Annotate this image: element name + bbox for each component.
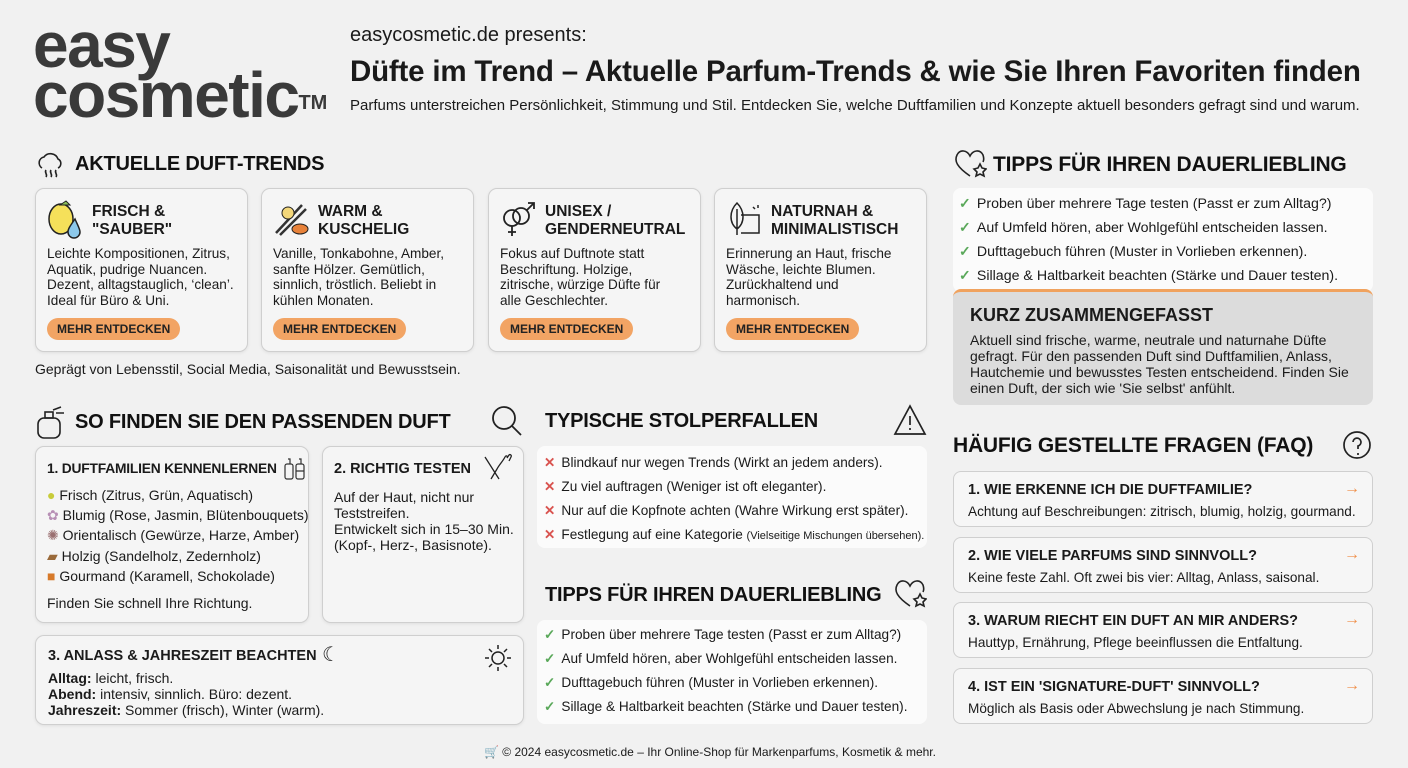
faq 2: → [1344,546,1360,563]
icon: hand [484,454,512,480]
list: tipps mid: ✓ Auf Umfeld hören, aber Wohlgefühl entscheiden lassen. [544,651,897,666]
list: tipps mid [537,620,927,724]
card: naturnah: Erinnerung an Haut, frische Wäsche, leichte Blumen. Zurückhaltend und harmonisch. [726,246,891,308]
icon: scent cloud [38,152,62,178]
list: tipps mid: ✓ Proben über mehrere Tage testen (Passt er zum Alltag?) [544,627,901,642]
icon: perfume [37,406,64,439]
button: MEHR ENTDECKEN [283,322,396,336]
card: anlass [35,635,524,725]
card: warm: WARM & [318,203,383,220]
card: richtig testen: Entwickelt sich in 15–30 Min. (Kopf-, Herz-, Basisnote). [334,521,514,553]
list: families [47,487,309,584]
card: duftfamilien: 1. DUFTFAMILIEN KENNENLERNEN [47,461,277,476]
heading: aktuelle duft-trends: AKTUELLE DUFT-TRENDS [75,153,324,175]
faq 4 [953,668,1373,724]
faq 4: Möglich als Basis oder Abwechslung je nach Stimmung. [968,701,1304,716]
card: frisch: FRISCH & [92,203,165,220]
list: tipps right: ✓ Sillage & Haltbarkeit beachten (Stärke und Dauer testen). [959,268,1338,284]
heading: stolperfallen [545,404,926,435]
icon: heart star [955,150,987,178]
faq 3: → [1344,611,1360,628]
card: anlass: Jahreszeit: Sommer (frisch), Winter (warm). [48,702,324,718]
button [500,318,633,340]
faq 3: 3. WARUM RIECHT EIN DUFT AN MIR ANDERS? [968,613,1298,629]
faq 2: 2. WIE VIELE PARFUMS SIND SINNVOLL? [968,548,1257,564]
summary box [953,289,1373,405]
card: frisch: "SAUBER" [92,221,172,238]
card: warm: KUSCHELIG [318,221,409,238]
card: naturnah: NATURNAH & [771,203,873,220]
card: richtig testen: Auf der Haut, nicht nur Teststreifen. [334,489,474,521]
card: naturnah [714,188,927,352]
heading: so finden sie: SO FINDEN SIE DEN PASSENDEN DUFT [75,411,450,433]
icon: vanilla [275,204,308,236]
card: richtig testen: 2. RICHTIG TESTEN [334,461,471,477]
list: families: ● Frisch (Zitrus, Grün, Aquatisch) [47,487,253,503]
faq 2 [953,537,1373,593]
button: MEHR ENTDECKEN [510,322,623,336]
icon: lemon drop [48,200,81,239]
list: tipps right: ✓ Auf Umfeld hören, aber Wohlgefühl entscheiden lassen. [959,220,1328,236]
list: families: ■ Gourmand (Karamell, Schokolade) [47,568,275,584]
faq 1: 1. WIE ERKENNE ICH DIE DUFTFAMILIE? [968,482,1252,498]
button [273,318,406,340]
icon: warning [894,404,926,435]
heading: tipps mid: TIPPS FÜR IHREN DAUERLIEBLING [545,584,881,606]
faq 4: 4. IST EIN 'SIGNATURE-DUFT' SINNVOLL? [968,679,1260,695]
logo: cosmeticTM [33,59,327,131]
list: stolperfallen: ✕ Nur auf die Kopfnote achten (Wahre Wirkung erst später). [544,503,908,518]
faq 4: → [1344,677,1360,694]
card: unisex [488,188,701,352]
list: stolperfallen: ✕ Blindkauf nur wegen Trends (Wirkt an jedem anders). [544,455,883,470]
summary box: KURZ ZUSAMMENGEFASST [970,305,1213,325]
card: unisex: GENDERNEUTRAL [545,221,685,238]
logo [33,9,327,131]
heading: faq: HÄUFIG GESTELLTE FRAGEN (FAQ) [953,434,1313,457]
icon: moon: ☾ [322,644,340,666]
icon: question [1343,431,1371,459]
card: unisex: UNISEX / [545,203,611,220]
icon: leaf [730,202,760,235]
button: MEHR ENTDECKEN [57,322,170,336]
list: tipps right: ✓ Proben über mehrere Tage testen (Passt er zum Alltag?) [959,196,1332,212]
presenter line: easycosmetic.de presents: [350,24,587,46]
card: anlass: Abend: intensiv, sinnlich. Büro: dezent. [48,686,292,702]
card: duftfamilien: Finden Sie schnell Ihre Richtung. [47,595,252,611]
faq 1: → [1344,480,1360,497]
card: anlass: 3. ANLASS & JAHRESZEIT BEACHTEN [48,648,317,664]
card: warm: Vanille, Tonkabohne, Amber, sanfte Hölzer. Gemütlich, sinnlich, tröstlich. Beliebt in kühlen Monaten. [273,246,444,308]
button: MEHR ENTDECKEN [736,322,849,336]
list: tipps mid: ✓ Sillage & Haltbarkeit beachten (Stärke und Dauer testen). [544,699,907,714]
button [726,318,859,340]
logo: easy [33,9,169,81]
subtitle: Parfums unterstreichen Persönlichkeit, Stimmung und Stil. Entdecken Sie, welche Duftfamilien und Konzepte aktuell besonders gefragt sind und warum. [350,97,1360,114]
card: warm [261,188,474,352]
card: duftfamilien [35,446,309,623]
icon: search [492,406,522,436]
faq 2: Keine feste Zahl. Oft zwei bis vier: Alltag, Anlass, saisonal. [968,570,1319,585]
card: naturnah: MINIMALISTISCH [771,221,898,238]
summary box: Aktuell sind frische, warme, neutrale und naturnahe Düfte gefragt. Für den passenden Duft sind Duftfamilien, Anlass, Hautchemie und bewusstes Testen entscheidend. Finden Sie einen Duft, der sich wie 'Sie selbst' anfühlt. [970,332,1349,396]
button [47,318,180,340]
card: unisex: Fokus auf Duftnote statt Beschriftung. Holzige, zitrische, würzige Düfte für alle Geschlechter. [500,246,660,308]
faq 3: Hauttyp, Ernährung, Pflege beeinflussen die Entfaltung. [968,635,1303,650]
list: stolperfallen: ✕ Festlegung auf eine Kategorie (Vielseitige Mischungen übersehen). [544,527,924,542]
list: families: ✿ Blumig (Rose, Jasmin, Blütenbouquets) [47,507,309,523]
trends footnote: Geprägt von Lebensstil, Social Media, Saisonalität und Bewusstsein. [35,361,461,377]
faq 3 [953,602,1373,658]
card: richtig testen [322,446,524,623]
title: Düfte im Trend – Aktuelle Parfum-Trends & wie Sie Ihren Favoriten finden [350,55,1361,88]
heading: so finden sie [37,406,522,439]
icon: sun [485,645,511,671]
card: anlass: Alltag: leicht, frisch. [48,670,173,686]
list: families: ▰ Holzig (Sandelholz, Zedernholz) [47,548,261,564]
card: frisch [35,188,248,352]
icon: gender [503,202,535,236]
list: stolperfallen [537,446,927,548]
footer: 🛒 © 2024 easycosmetic.de – Ihr Online-Shop für Markenparfums, Kosmetik & mehr. [484,745,936,759]
card: frisch: Leichte Kompositionen, Zitrus, Aquatik, pudrige Nuancen. Dezent, alltagstauglich, ‘clean’. Ideal für Büro & Uni. [47,246,234,308]
heading: tipps right: TIPPS FÜR IHREN DAUERLIEBLING [993,153,1347,176]
list: tipps right [953,188,1373,292]
icon: heart star [895,580,927,608]
list: stolperfallen: ✕ Zu viel auftragen (Weniger ist oft eleganter). [544,479,826,494]
list: tipps mid: ✓ Dufttagebuch führen (Muster in Vorlieben erkennen). [544,675,878,690]
icon: bottles [284,458,305,480]
list: tipps right: ✓ Dufttagebuch führen (Muster in Vorlieben erkennen). [959,244,1307,260]
faq 1 [953,471,1373,527]
faq 1: Achtung auf Beschreibungen: zitrisch, blumig, holzig, gourmand. [968,504,1356,519]
list: families: ✺ Orientalisch (Gewürze, Harze, Amber) [47,527,299,543]
heading: stolperfallen: TYPISCHE STOLPERFALLEN [545,410,818,432]
